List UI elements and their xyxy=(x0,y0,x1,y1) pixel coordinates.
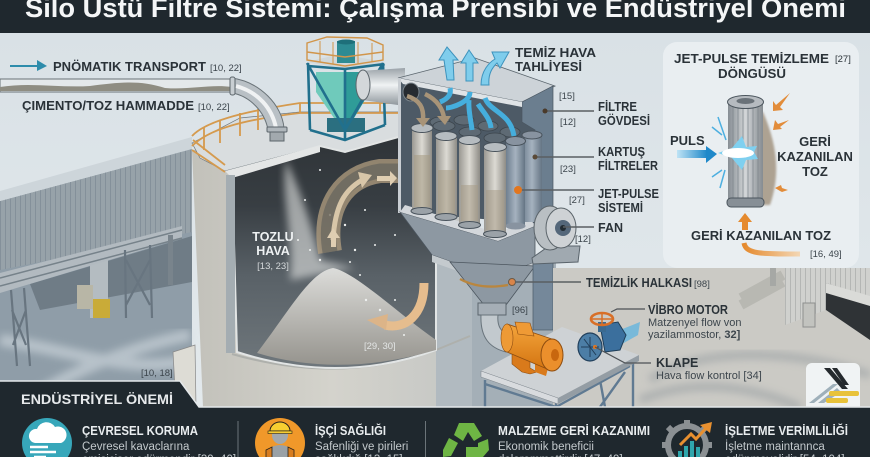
label: vibro motor: yazilammostor, 32] xyxy=(648,329,740,341)
item: environmental protection: Çevresel kavaclarına xyxy=(82,441,190,453)
panel heading: JET-PULSE TEMİZLEME xyxy=(674,51,829,66)
label: recovered dust right: GERİ xyxy=(799,134,831,149)
label: cartridge filters xyxy=(532,145,658,175)
label: pile reference: [29, 30] xyxy=(364,341,396,352)
label: puls: PULS xyxy=(670,133,705,148)
right background yard and building xyxy=(553,268,870,407)
label: damper: KLAPE xyxy=(656,356,698,370)
label: jet pulse system: JET-PULSE xyxy=(598,187,659,201)
label: fan: [12] xyxy=(575,234,591,245)
pulse spark xyxy=(712,117,758,188)
filter four xyxy=(484,142,506,238)
arrows: clean air in housing xyxy=(440,88,514,136)
silo roof xyxy=(192,112,425,171)
item: material recovery: Ekonomik beneficii xyxy=(498,441,594,453)
back row tops xyxy=(430,115,520,143)
label: raw material: ÇIMENTO/TOZ HAMMADDE [10, 22] xyxy=(22,99,230,113)
panel heading: [27] xyxy=(835,54,851,65)
label: cartridge filters: FİLTRELER xyxy=(598,158,658,173)
label: filter body xyxy=(542,91,650,128)
label: jet pulse system xyxy=(514,186,659,215)
filter back right xyxy=(522,131,542,222)
railing xyxy=(192,103,400,172)
arrow: recovered dust out xyxy=(744,243,800,254)
filter housing xyxy=(398,58,555,352)
divider xyxy=(238,421,239,457)
label: clean air discharge: TEMİZ HAVA xyxy=(515,45,596,60)
label: filter body: FİLTRE xyxy=(598,99,637,114)
arrow: pulse xyxy=(677,146,717,163)
hopper xyxy=(400,212,535,278)
silo interior xyxy=(232,136,436,368)
item: operational efficiency: İŞLETME VERİMLİLİĞİ xyxy=(725,423,848,438)
label: recovered dust right: TOZ xyxy=(802,164,828,179)
arrows: dust into filters xyxy=(407,94,451,127)
label: jet pulse system: [27] xyxy=(569,195,585,206)
structure behind pump xyxy=(470,262,556,407)
label: clean air discharge: TAHLİYESİ xyxy=(515,59,582,74)
support column xyxy=(533,260,553,330)
icon: worker xyxy=(255,418,305,457)
arrow: dust returning to pile xyxy=(367,283,424,330)
teal top unit xyxy=(307,37,385,140)
panel: industrial importance xyxy=(0,381,870,457)
pneumatic transport pipe xyxy=(0,77,287,141)
material pile xyxy=(257,268,436,365)
panel: jet-pulse cleaning cycle xyxy=(663,42,859,268)
label: vibro motor: Matzenyel flow von xyxy=(648,317,742,329)
icon: recycling xyxy=(443,423,489,457)
left factory building and ground xyxy=(0,137,196,407)
label: cartridge filters: KARTUŞ xyxy=(598,145,645,159)
recovered dust cloud xyxy=(758,112,776,205)
label: filter body: GÖVDESİ xyxy=(598,113,650,128)
label: fan: FAN xyxy=(598,221,623,235)
filter two xyxy=(435,132,457,220)
silo xyxy=(192,112,472,407)
label: reference: [10, 18] xyxy=(141,368,173,379)
item: worker health: İŞÇİ SAĞLIĞI xyxy=(315,423,386,438)
item: environmental protection: ÇEVRESEL KORUMA xyxy=(82,423,199,438)
item: operational efficiency: İşletme maintannca xyxy=(725,440,825,453)
label: damper xyxy=(595,347,762,382)
cartridge filters xyxy=(411,115,542,238)
label: recovered dust bottom: GERİ KAZANILAN TOZ xyxy=(691,228,831,243)
label: cleaning ring: TEMİZLİK HALKASI[98] xyxy=(586,275,710,290)
cartridge filter xyxy=(727,96,764,207)
label: fan xyxy=(563,221,623,245)
arrows: dust off the filter xyxy=(773,93,790,192)
filter three xyxy=(458,136,480,228)
panel heading: DÖNGÜSÜ xyxy=(718,66,786,81)
label: vibro motor: VİBRO MOTOR xyxy=(648,302,728,317)
label: filter body: [12] xyxy=(560,117,576,128)
label: vibro motor xyxy=(611,302,742,341)
fan xyxy=(532,206,580,264)
arrow: pneumatic transport xyxy=(10,60,47,71)
label: filter body: [15] xyxy=(559,91,575,102)
label: pneumatic transport: PNÖMATIK TRANSPORT [10, 22] xyxy=(53,59,242,74)
duct into filter xyxy=(356,68,405,106)
vibro motor xyxy=(501,322,563,376)
title bar xyxy=(0,0,870,33)
label: recovered dust right: KAZANILAN xyxy=(777,149,853,164)
filter right blue xyxy=(506,136,526,230)
label: dusty air: HAVA xyxy=(256,244,290,258)
panel heading: ENDÜSTRİYEL ÖNEMİ xyxy=(21,392,173,407)
icon: environmental cloud xyxy=(22,418,72,457)
divider xyxy=(425,421,426,457)
filter one xyxy=(411,124,433,214)
logo xyxy=(806,363,860,413)
item: worker health: Safenliği ve pirileri xyxy=(315,441,408,453)
label: cleaning ring xyxy=(508,275,710,290)
arrow: up to filter xyxy=(738,213,752,230)
label: 96 reference: [96] xyxy=(512,305,528,316)
dust plume xyxy=(285,160,355,280)
arrow: dusty air up into filter xyxy=(327,171,414,252)
label: damper: Hava flow kontrol [34] xyxy=(656,370,762,382)
icon: gear with growth chart xyxy=(662,420,712,457)
label: dusty air: TOZLU xyxy=(252,230,294,244)
reference: [16, 49] xyxy=(810,249,842,260)
label: dusty air: [13, 23] xyxy=(257,261,289,272)
pump platform xyxy=(481,327,639,407)
label: cartridge filters: [23] xyxy=(560,164,576,175)
label: jet pulse system: SİSTEMİ xyxy=(598,200,643,215)
item: material recovery: MALZEME GERİ KAZANIMI xyxy=(498,423,650,438)
valve xyxy=(578,313,640,361)
arrows: clean air exhaust xyxy=(439,47,509,85)
